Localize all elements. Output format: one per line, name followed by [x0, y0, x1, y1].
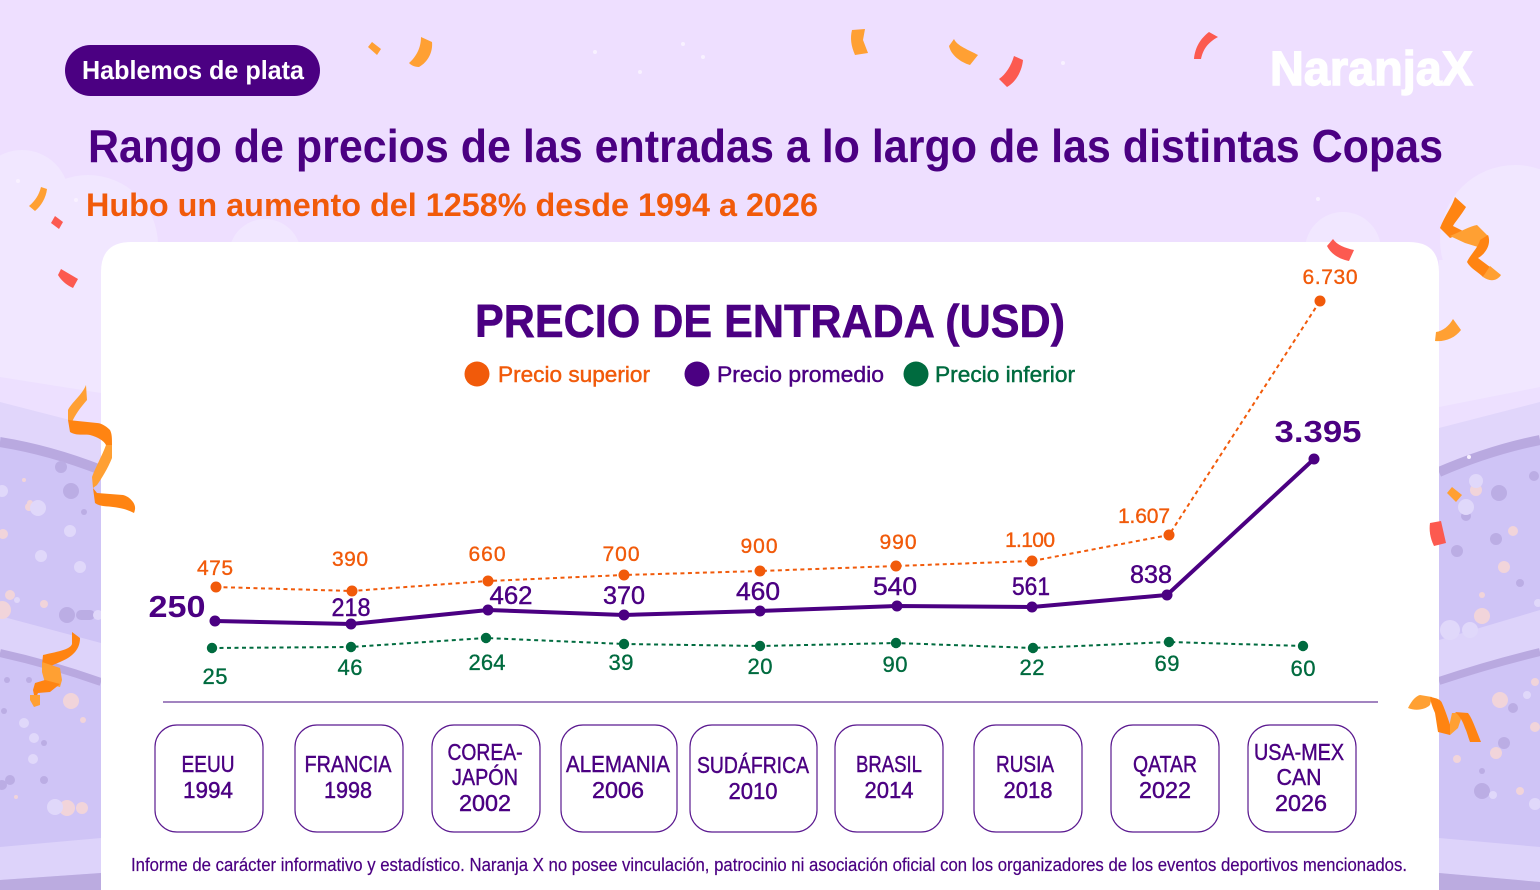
series: precio inferior: 22	[1020, 655, 1044, 680]
country box: Rusia 2018	[974, 725, 1082, 832]
series: precio inferior: 25	[202, 664, 228, 689]
ribbon: upper right	[1440, 197, 1501, 280]
country box: Corea-Japón 2002: COREA-	[448, 739, 522, 765]
panel: chart card	[101, 242, 1439, 890]
country box: Brasil 2014: BRASIL	[856, 751, 922, 777]
legend: Precio inferior	[935, 362, 1075, 387]
country box: Brasil 2014	[835, 725, 943, 832]
series: precio promedio: 460	[736, 578, 780, 606]
series: precio promedio: 561	[1012, 573, 1050, 601]
title: Rango de precios de las entradas a lo largo de las distintas Copas	[88, 120, 1443, 172]
country box: EEUU 1994	[155, 725, 263, 832]
footnote: Informe de carácter informativo y estadístico. Naranja X no posee vinculación, patrocinio ni asociación oficial con los organizadores de los eventos deportivos mencionados.	[131, 855, 1407, 875]
series: precio promedio: 838	[1130, 561, 1172, 589]
series: precio superior: 660	[468, 543, 506, 566]
country box: USA-MEX CAN 2026: USA-MEX	[1254, 739, 1344, 765]
country box: USA-MEX CAN 2026	[1248, 725, 1356, 832]
series: precio promedio: 462	[490, 582, 532, 610]
badge: Hablemos de plata: Hablemos de plata	[82, 55, 305, 85]
series: precio inferior: 39	[608, 650, 634, 675]
country box: EEUU 1994: EEUU	[182, 751, 234, 777]
series: precio promedio: 540	[873, 573, 917, 601]
country box: Sudáfrica 2010: SUDÁFRICA	[697, 752, 810, 778]
series: precio promedio: 3.395	[1274, 414, 1362, 449]
series: precio superior: 1.607	[1118, 505, 1170, 528]
series: precio inferior: 90	[882, 652, 908, 677]
series: precio superior: 390	[332, 548, 368, 571]
series: precio inferior: 264	[468, 650, 506, 675]
country box: Sudáfrica 2010: 2010	[728, 778, 778, 804]
chart heading: PRECIO DE ENTRADA (USD)	[475, 295, 1065, 347]
country box: Alemania 2006	[561, 725, 677, 832]
ribbon: lower left	[30, 632, 80, 707]
country box: Alemania 2006: 2006	[592, 777, 644, 803]
series: precio inferior: 20	[748, 654, 772, 679]
country box: Rusia 2018: 2018	[1004, 777, 1052, 803]
ribbon: lower right	[1408, 695, 1481, 742]
series: precio superior: 700	[602, 543, 640, 566]
country box: USA-MEX CAN 2026: 2026	[1275, 790, 1327, 816]
country box: Francia 1998	[295, 725, 403, 832]
series: precio promedio: 250	[148, 589, 206, 624]
country box: Francia 1998: 1998	[324, 777, 372, 803]
country box: USA-MEX CAN 2026: CAN	[1276, 764, 1322, 790]
country box: Brasil 2014: 2014	[864, 777, 914, 803]
series: precio superior	[197, 266, 1358, 596]
series: precio promedio	[148, 414, 1362, 630]
country box: EEUU 1994: 1994	[183, 777, 233, 803]
country box: Alemania 2006: ALEMANIA	[566, 751, 671, 777]
country box: Qatar 2022: QATAR	[1133, 751, 1197, 777]
series: precio inferior: 60	[1290, 656, 1316, 681]
country box: Rusia 2018: RUSIA	[996, 751, 1055, 777]
legend: Precio superior	[498, 362, 650, 387]
country box: Corea-Japón 2002: JAPÓN	[452, 764, 518, 790]
line chart	[148, 266, 1378, 702]
series: precio inferior	[202, 633, 1316, 689]
country box: Qatar 2022	[1111, 725, 1219, 832]
series: precio superior: 900	[740, 535, 778, 558]
ribbon: upper left	[68, 385, 135, 513]
series: precio promedio: 370	[603, 582, 645, 610]
series: precio inferior: 69	[1154, 651, 1180, 676]
country box: Corea-Japón 2002: 2002	[459, 790, 511, 816]
series: precio promedio: 218	[332, 594, 370, 622]
legend	[464, 362, 1075, 387]
legend: Precio promedio	[717, 362, 884, 387]
series: precio superior: 1.100	[1005, 529, 1055, 552]
country box: Francia 1998: FRANCIA	[304, 751, 392, 777]
series: precio inferior: 46	[338, 655, 362, 680]
series: precio superior: 6.730	[1302, 266, 1358, 289]
confetti pieces	[29, 29, 1462, 546]
subtitle: Hubo un aumento del 1258% desde 1994 a 2026	[86, 187, 818, 223]
country box: Qatar 2022: 2022	[1139, 777, 1191, 803]
series: precio superior: 475	[197, 557, 233, 580]
logo: Naranja X: NaranjaX	[1270, 43, 1473, 96]
country box: Corea-Japón 2002	[432, 725, 540, 832]
badge: Hablemos de plata	[65, 45, 320, 96]
country box: Sudáfrica 2010	[690, 725, 817, 832]
series: precio superior: 990	[880, 531, 916, 554]
